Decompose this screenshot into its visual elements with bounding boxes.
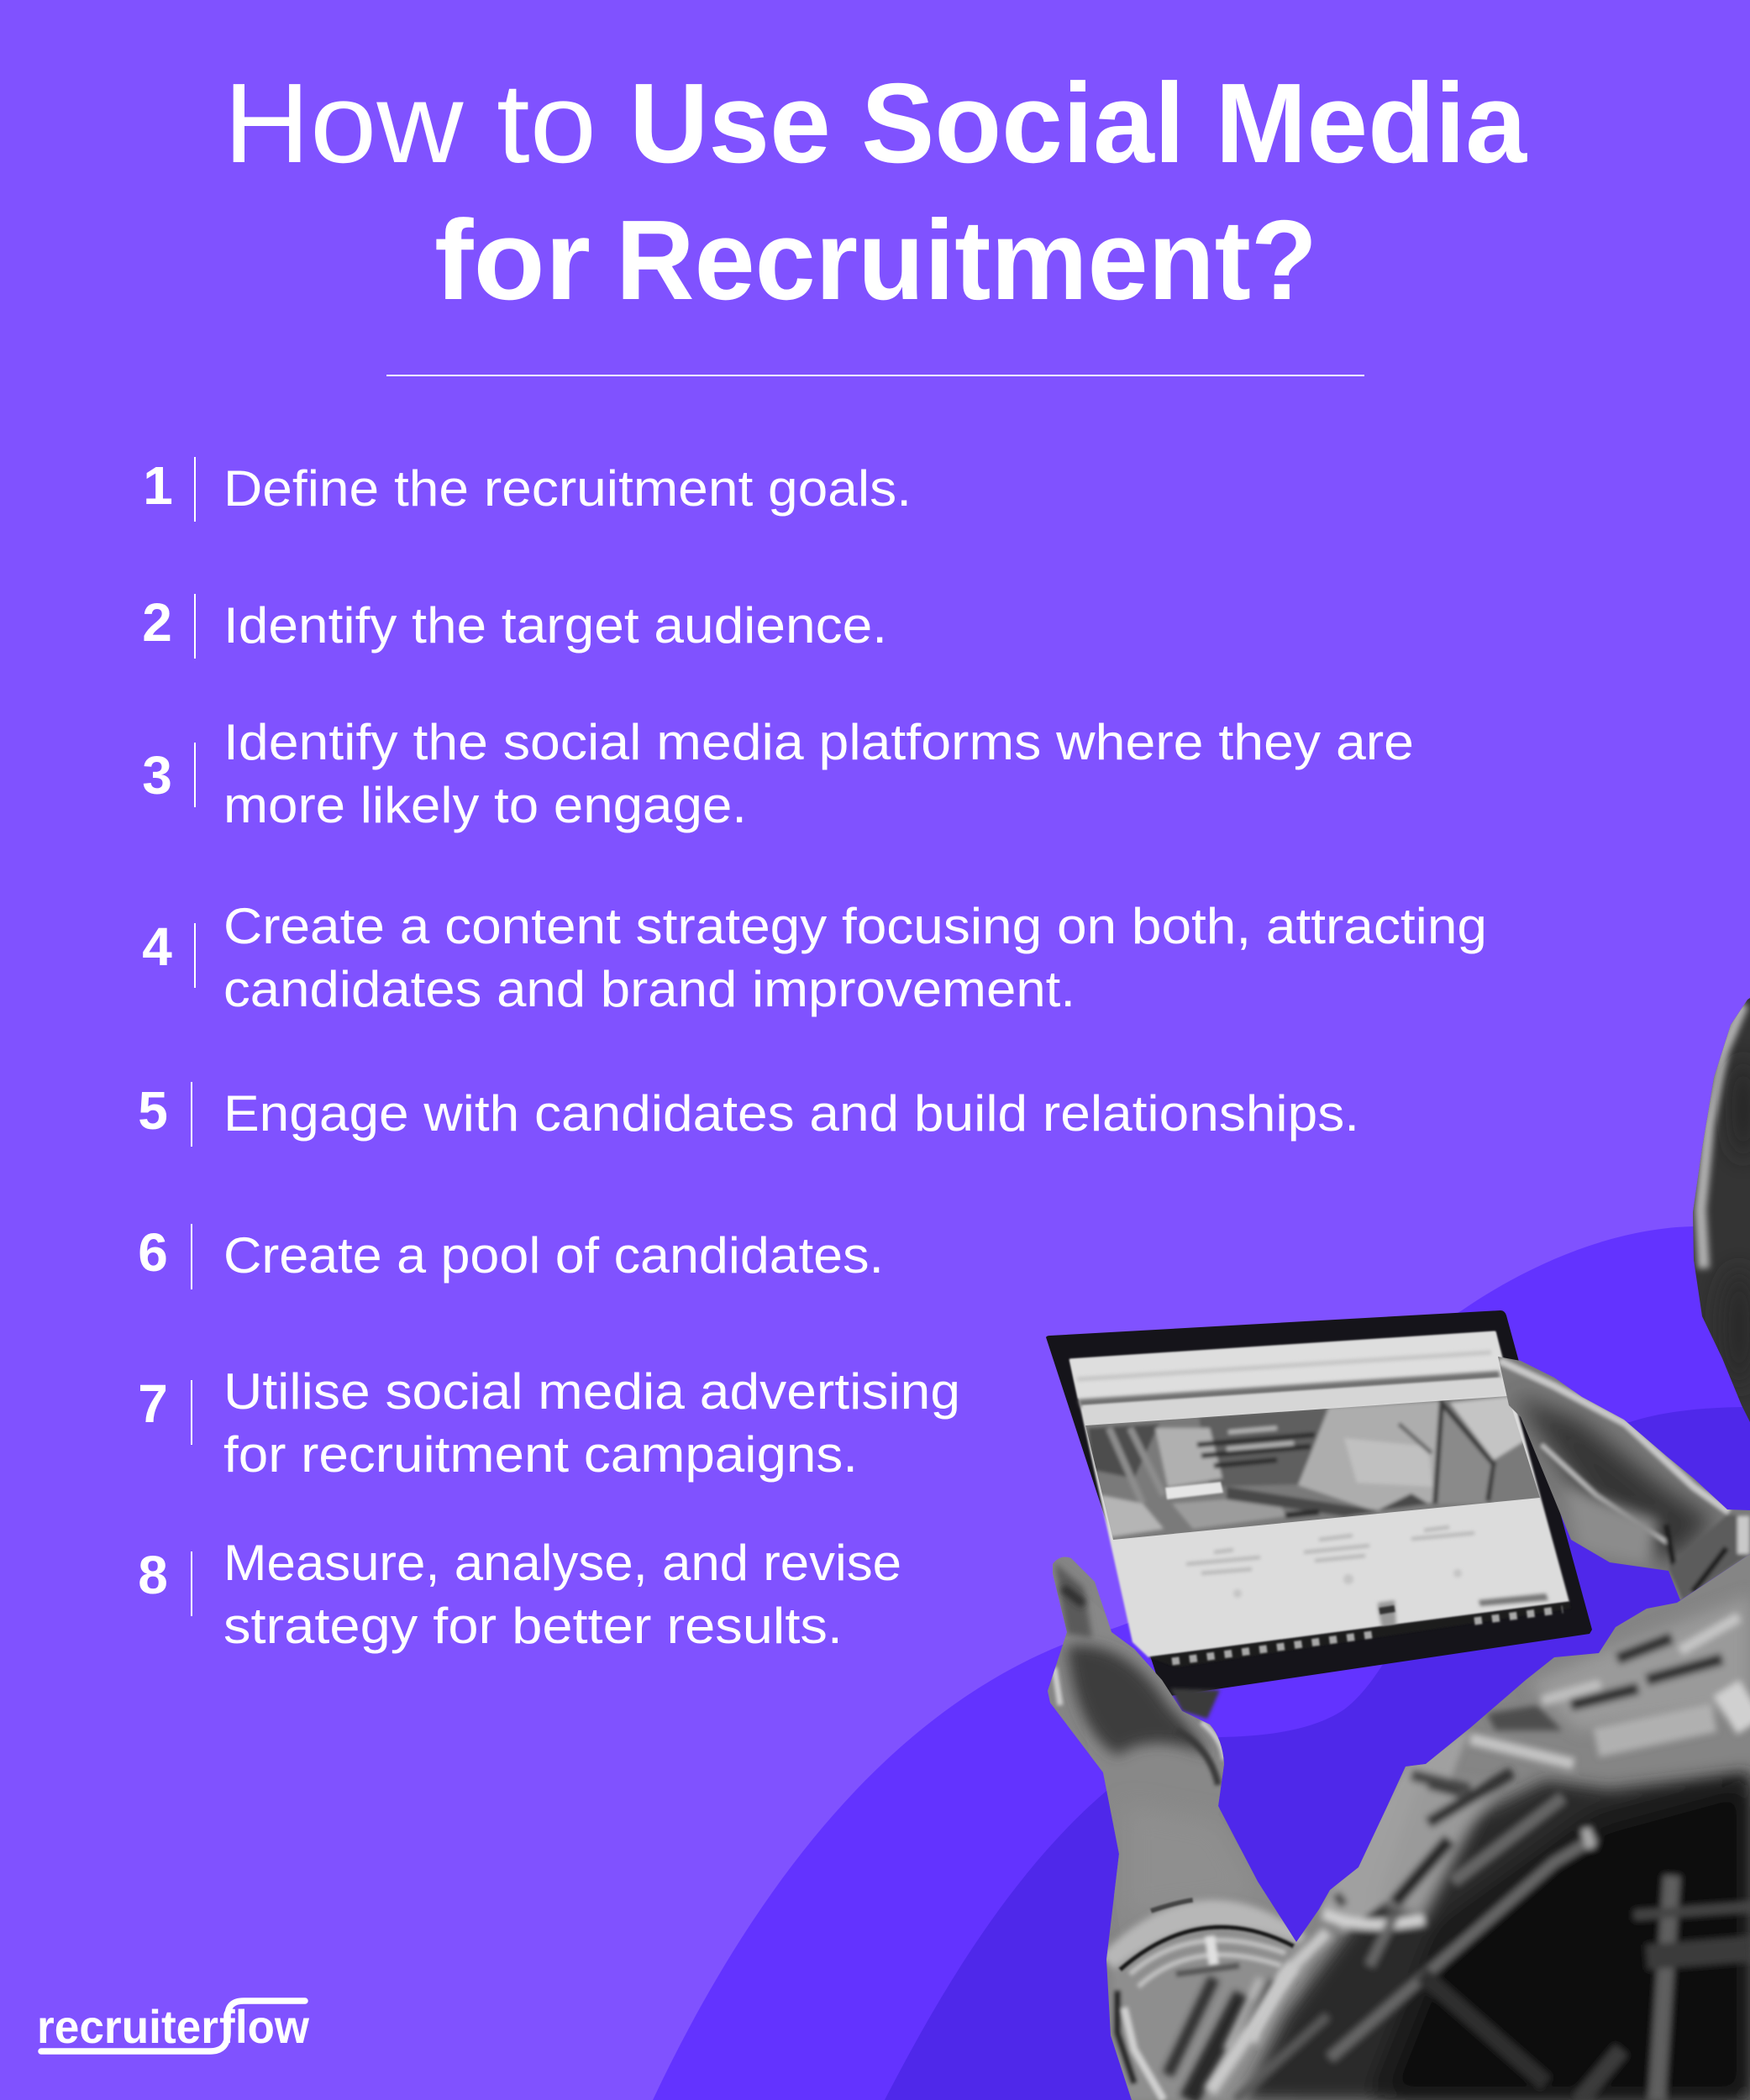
step 7: 7 [138,1373,168,1434]
step 6: Create a pool of candidates. [223,1227,884,1284]
step 2: 2 [142,592,172,653]
background wave: light violet [653,1225,1750,2100]
title: How to [223,60,596,186]
step 4 [142,898,1487,1017]
step 1: 1 [143,455,173,516]
photo: tablet [1046,1310,1592,1697]
step 8: 8 [138,1545,168,1605]
photo: man's right hand gripping tablet [1498,1357,1750,1600]
shirt upper light panels and stripes [1319,1728,1470,1932]
step 8: strategy for better results. [223,1598,843,1654]
step 4: Create a content strategy focusing on both, attracting [223,898,1487,954]
logo: recruiterflow: f [219,2000,235,2053]
logo: recruiterflow: recruiter [37,2000,218,2053]
cuff edge [1323,1914,1424,1924]
step 8 [138,1535,901,1654]
step 5: 5 [138,1080,168,1141]
photo: tablet support fingers [1170,1688,1220,1719]
title: Use Social Media [629,60,1527,186]
step 3 [142,714,1414,833]
website content text [1186,1527,1474,1598]
step 3: Identify the social media platforms where they are [223,714,1414,770]
step 6: 6 [138,1222,168,1283]
step 3: 3 [142,745,172,806]
photo: man's arm, left hand and plaid shirt [1042,1546,1750,2100]
cuff [1669,1515,1750,1600]
step 5: Engage with candidates and build relationships. [223,1085,1359,1142]
left sleeve stripes [1111,1900,1311,2100]
step 8: Measure, analyse, and revise [223,1535,901,1591]
step 4: candidates and brand improvement. [223,961,1075,1017]
background wave: dark violet [885,1407,1750,2100]
step 7: Utilise social media advertising [223,1363,960,1420]
step 7 [138,1363,960,1483]
title [223,60,1527,323]
tablet body [1046,1310,1592,1697]
title divider [386,375,1364,376]
shirt base [1042,1546,1750,2100]
step 7: for recruitment campaigns. [223,1426,858,1483]
browser toolbar [1069,1331,1504,1399]
step 3: more likely to engage. [223,777,747,833]
step 2: Identify the target audience. [223,597,887,654]
hero button [1165,1482,1223,1499]
step 4: 4 [142,916,172,977]
photo: man's head [1693,998,1750,1422]
shirt torso and plaid [1235,1596,1750,2100]
website hero image [1080,1390,1546,1546]
step 1: Define the recruitment goals. [223,460,912,517]
taskbar band [1148,1602,1571,1667]
title: for [434,197,591,323]
torso plaid stripes [1330,1837,1596,2058]
website navigation bar [1082,1378,1506,1425]
tablet screen [1069,1331,1569,1657]
logo: recruiterflow: low [235,2000,309,2053]
shirt dark torso [1243,1772,1750,2100]
taskbar items on screen [1378,1600,1396,1628]
title: Recruitment? [616,197,1317,323]
hand tone [1053,1573,1299,1942]
